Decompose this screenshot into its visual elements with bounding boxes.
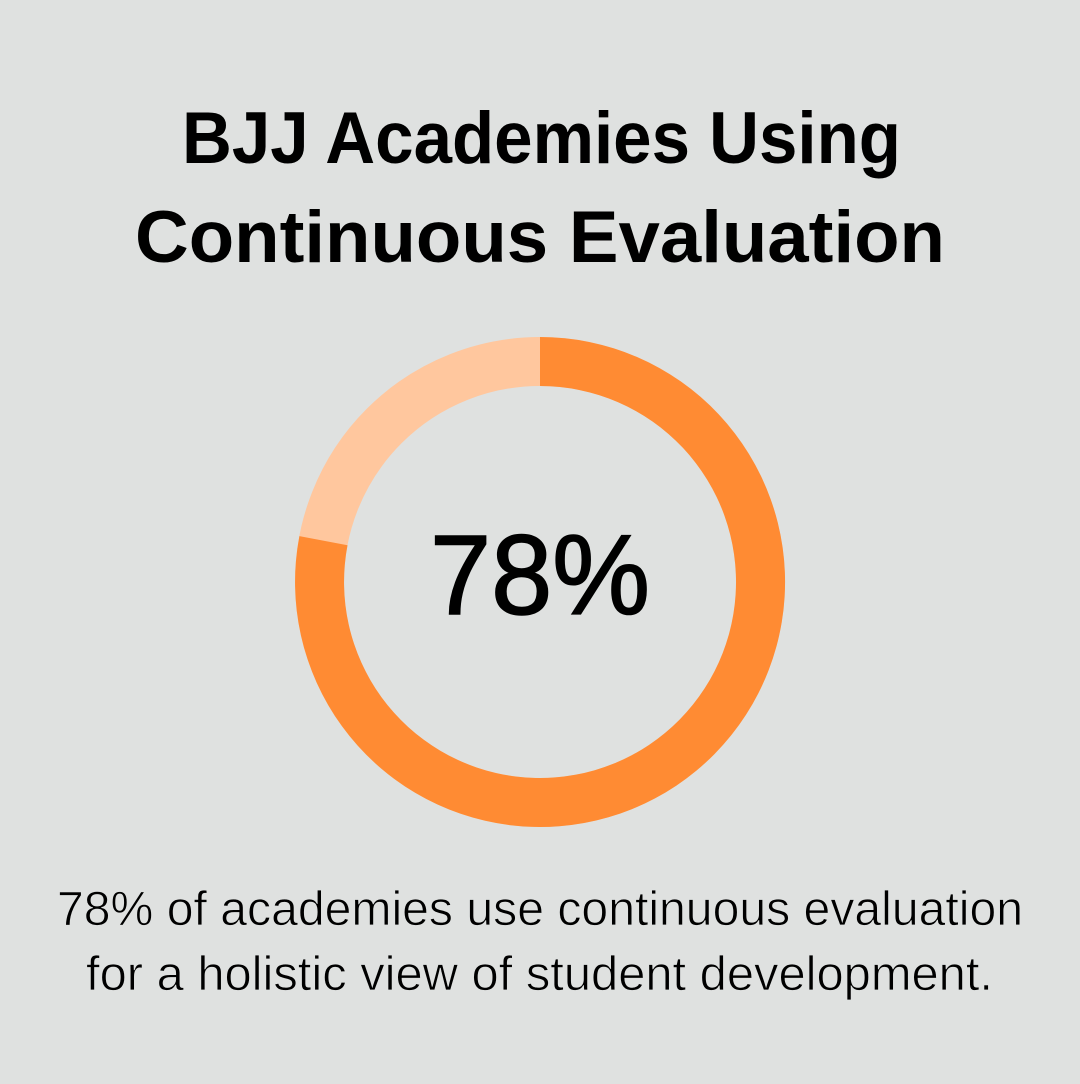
- title: [135, 98, 945, 278]
- description: [57, 883, 1023, 1001]
- description: 78% of academies use continuous evaluation: [57, 883, 1023, 936]
- title: Continuous Evaluation: [135, 197, 945, 278]
- donut chart: 78%: [295, 337, 785, 827]
- description: for a holistic view of student development.: [86, 948, 993, 1001]
- center value: 78%: [430, 512, 650, 638]
- title: BJJ Academies Using: [182, 98, 901, 179]
